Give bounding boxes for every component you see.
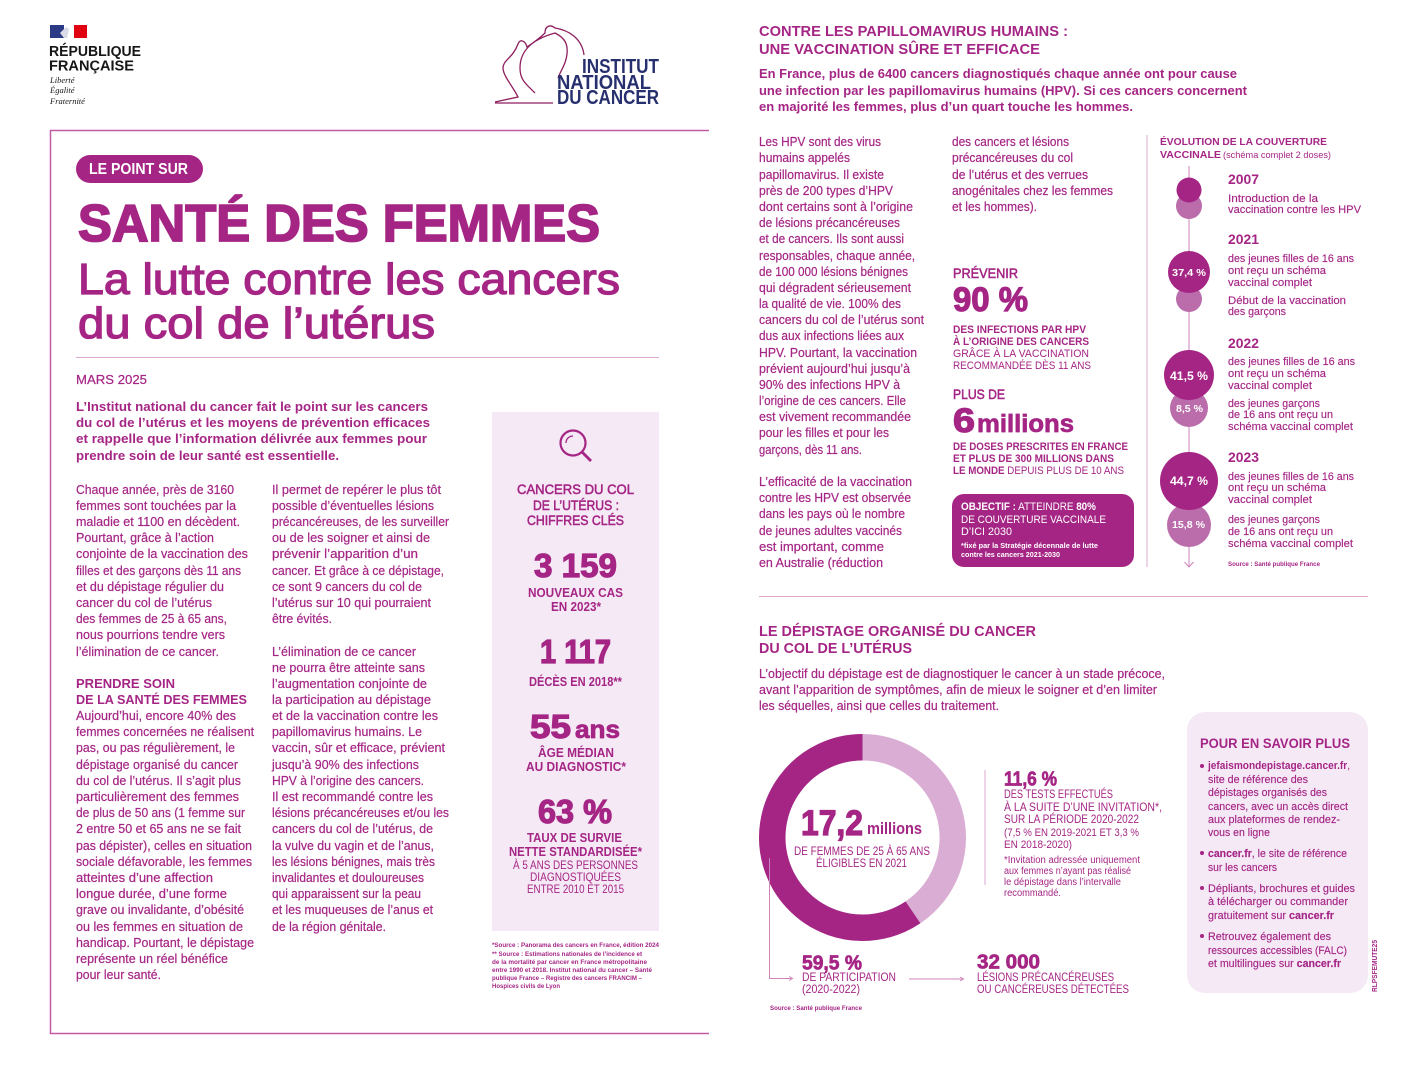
year 2022: de 16 ans ont reçu un (1228, 409, 1333, 421)
text column: HPV: garçons, dès 11 ans. (759, 443, 862, 457)
intro: dépistage (759, 667, 1165, 713)
text column 1: sociale défavorable, les femmes (76, 855, 252, 869)
stat: participation: (2020-2022) (802, 984, 860, 996)
stat: survie: ENTRE 2010 ET 2015 (527, 884, 624, 896)
donut centre label: ÉLIGIBLES EN 2021 (816, 857, 907, 870)
item: ressources: ressources accessibles (FALC) (1208, 945, 1347, 957)
stat: tests après invitation: aux femmes n’ayant pas réalisé (1004, 866, 1131, 877)
text column 2: de la région génitale. (272, 920, 386, 934)
year 2021: Début de la vaccination (1228, 295, 1346, 307)
stat: âge médian (526, 708, 626, 774)
year 2007: 2007 (1228, 172, 1259, 187)
text column 2: Il est recommandé contre les (272, 790, 433, 804)
heading: vaccination (759, 23, 1068, 58)
text column 2 (271, 483, 449, 934)
stat: survie: NETTE STANDARDISÉE* (509, 844, 642, 859)
text column: HPV suite: des cancers et lésions (952, 135, 1069, 149)
stat: tests après invitation: DES TESTS EFFECTUÉS (1004, 788, 1113, 801)
text column 2: HPV à l’origine des cancers. (272, 774, 424, 788)
stat: nouveaux cas: 3 159 (534, 547, 617, 584)
heading: prendre soin (76, 676, 247, 707)
year 2023: 44,7 % (1170, 476, 1208, 488)
timeline heading (1160, 135, 1331, 161)
intro text: et rappelle que l’information délivrée aux femmes pour (76, 431, 427, 446)
footnotes: ** Source : Estimations nationales de l’incidence et (492, 951, 643, 958)
stat: survie (509, 793, 642, 896)
logo: République française: Égalité (49, 85, 76, 95)
year 2023: schéma vaccinal complet (1228, 538, 1354, 550)
tag: le point sur (76, 155, 203, 183)
year 2022: vaccinal complet (1228, 380, 1313, 392)
stat: nouveaux cas (528, 547, 623, 614)
text column 2: l’utérus sur 10 qui pourraient (272, 596, 431, 610)
left page frame (50, 130, 709, 1034)
stat: lésions détectées: OU CANCÉREUSES DÉTECTÉES (977, 983, 1129, 996)
stat: survie: 63 % (538, 793, 612, 830)
text column 1: longue durée, d’une forme (76, 887, 227, 901)
intro text: L’Institut national du cancer fait le point sur les cancers (76, 399, 428, 414)
heading: dépistage: LE DÉPISTAGE ORGANISÉ DU CANCER (759, 623, 1037, 640)
donut centre label: DE FEMMES DE 25 À 65 ANS (794, 845, 930, 858)
footnotes: *Source : Panorama des cancers en France, édition 2024 (492, 942, 659, 949)
intro: vaccination: en majorité les femmes, plus d’un quart touche les hommes. (759, 99, 1133, 114)
text column: HPV: en Australie (réduction (759, 556, 883, 570)
text column 2: les lésions bénignes, mais très (272, 855, 435, 869)
stat: 6 millions: LE MONDE DEPUIS PLUS DE 10 ANS (953, 465, 1124, 477)
year 2023: 15,8 % (1172, 519, 1206, 531)
document reference code: RLPSFEMUTE25 (1370, 940, 1379, 992)
heading: prendre soin: PRENDRE SOIN (76, 676, 175, 691)
text column 2: ne pourra être atteinte sans (272, 661, 425, 675)
text column 1: et du dépistage régulier du (76, 580, 224, 594)
source: dépistage: Source : Santé publique France (770, 1005, 862, 1012)
stat: participation: 59,5 % (802, 952, 862, 974)
text column: HPV: de 100 000 lésions bénignes (759, 265, 908, 279)
donut centre label: 17,2 (801, 804, 863, 843)
text column 2: lésions précancéreuses et/ou les (272, 806, 449, 820)
heading: chiffres clés (517, 481, 634, 528)
text column 2: vaccin, sûr et efficace, prévient (272, 741, 445, 755)
donut centre label: millions (867, 819, 922, 838)
logo: Institut national du cancer (495, 26, 659, 109)
item: cancer.fr: cancer.fr, le site de référence (1208, 848, 1347, 860)
stat: tests après invitation: (7,5 % EN 2019-2021 ET 3,3 % (1004, 827, 1139, 839)
logo: République française: Fraternité (49, 96, 86, 106)
item: jefaismondepistage: aux plateformes de rendez- (1208, 814, 1340, 826)
text column 2: jusqu’à 90% des infections (271, 758, 419, 772)
text column 1: cancer du col de l’utérus (76, 596, 212, 610)
text column 2: cancer. Et grâce à ce dépistage, (272, 564, 444, 578)
text column: HPV suite: précancéreuses du col (952, 151, 1073, 165)
text column: HPV suite: et les hommes). (952, 200, 1037, 214)
stat: prévenir 90%: GRÂCE À LA VACCINATION (953, 347, 1089, 360)
year 2023: de 16 ans ont reçu un (1228, 526, 1333, 538)
footnotes (492, 942, 659, 990)
logo: Institut national du cancer: DU CANCER (557, 87, 659, 109)
stat: prévenir 90%: RECOMMANDÉE DÈS 11 ANS (953, 359, 1091, 372)
stat: nouveaux cas: NOUVEAUX CAS (528, 586, 623, 600)
text column: HPV: 90% des infections HPV à (759, 378, 900, 392)
text column 2: ce sont 9 cancers du col de (272, 580, 422, 594)
heading: chiffres clés: DE L’UTÉRUS : (533, 497, 619, 513)
intro: dépistage: les séquelles, ainsi que celles du traitement. (759, 699, 999, 713)
text column 2: L’élimination de ce cancer (272, 645, 416, 659)
text column 2: cancers du col de l’utérus, de (272, 822, 433, 836)
text column 1: Aujourd’hui, encore 40% des (76, 709, 236, 723)
text column 2: Il permet de repérer le plus tôt (272, 483, 442, 497)
timeline axis (1184, 166, 1194, 567)
text column 1: conjointe de la vaccination des (76, 547, 248, 561)
text column 2: ou de les soigner et ainsi de (272, 531, 430, 545)
stat: 6 millions: millions (977, 410, 1074, 438)
timeline source: Source : Santé publique France (1228, 561, 1320, 568)
item: dépliants (1200, 883, 1355, 922)
stat: 6 millions: DE DOSES PRESCRITES EN FRANCE (953, 441, 1128, 453)
year 2023: 2023 (1228, 450, 1259, 465)
text column 2: papillomavirus humains. Le (272, 725, 422, 739)
text column 2: qui apparaissent sur la peau (272, 887, 421, 901)
intro text: prendre soin de leur santé est essentielle. (76, 448, 339, 463)
stat: participation (802, 952, 896, 996)
text column 1: Chaque année, près de 3160 (76, 483, 234, 497)
text column: HPV: Les HPV sont des virus (759, 135, 881, 149)
heading: chiffres clés: CANCERS DU COL (517, 481, 634, 497)
year 2021 (1168, 232, 1354, 318)
tag: le point sur: LE POINT SUR (89, 161, 188, 178)
text column: HPV: et de cancers. Ils sont aussi (759, 232, 904, 246)
text column: HPV: prévient aujourd’hui jusqu’à (759, 362, 910, 376)
text column: HPV: est vivement recommandée (759, 410, 911, 424)
logo: République française (49, 25, 141, 106)
text column 2: possible d’éventuelles lésions (272, 499, 434, 513)
donut centre label (794, 804, 930, 870)
heading: dépistage: DU COL DE L’UTÉRUS (759, 640, 912, 657)
year 2023: ont reçu un schéma (1228, 482, 1327, 494)
heading: dépistage (759, 623, 1037, 657)
callout: objectif 80%: DE COUVERTURE VACCINALE (961, 514, 1106, 526)
text column 1: pas dépister), celles en situation (76, 839, 252, 853)
arrow: donut to participation (770, 858, 792, 980)
year 2022: ont reçu un schéma (1228, 368, 1327, 380)
title: SANTÉ DES FEMMES (78, 195, 600, 253)
text column 1: représente un réel bénéfice (76, 952, 228, 966)
text column 1: de plus de 50 ans (1 femme sur (76, 806, 245, 820)
stat: âge médian: 55 (530, 708, 571, 745)
item: cancer.fr: sur les cancers (1208, 862, 1277, 874)
item: jefaismondepistage: jefaismondepistage.cancer.fr, (1207, 760, 1350, 772)
year 2007 (1176, 172, 1361, 219)
year 2022 (1164, 336, 1355, 433)
text column 1: des femmes de 25 à 65 ans, (76, 612, 227, 626)
intro: dépistage: L’objectif du dépistage est de diagnostiquer le cancer à un stade précoce, (759, 667, 1165, 681)
text column: HPV suite: de l’utérus et des verrues (952, 168, 1088, 182)
year 2021: 2021 (1228, 232, 1259, 247)
text column 1: ou les femmes en situation de (76, 920, 243, 934)
text column: HPV: de lésions précancéreuses (759, 216, 900, 230)
year 2007: Introduction de la (1228, 193, 1319, 205)
stat: tests après invitation: 11,6 % (1004, 768, 1057, 790)
stat: tests après invitation: le dépistage dans l’intervalle (1004, 877, 1122, 888)
year 2021: 37,4 % (1172, 267, 1207, 279)
stat: tests après invitation: À LA SUITE D’UNE INVITATION*, (1004, 801, 1162, 814)
item: ressources (1200, 931, 1347, 970)
item: dépliants: gratuitement sur cancer.fr (1208, 910, 1335, 922)
text column: HPV suite (952, 135, 1113, 214)
item: ressources: Retrouvez également des (1208, 931, 1331, 943)
timeline heading: VACCINALE (1160, 149, 1221, 161)
item: cancer.fr (1200, 848, 1347, 874)
year 2022: des jeunes filles de 16 ans (1228, 356, 1355, 368)
text column 2: invalidantes et douloureuses (272, 871, 424, 885)
text column: HPV: qui dégradent sérieusement (759, 281, 911, 295)
stat: survie: DIAGNOSTIQUÉES (530, 871, 621, 884)
subtitle: du col de l’utérus (78, 300, 435, 348)
text column: HPV: pour les filles et pour les (759, 426, 889, 440)
text column 1: du col de l’utérus. Il s’agit plus (76, 774, 241, 788)
stat: tests après invitation (1004, 768, 1162, 899)
stat: prévenir 90% (953, 265, 1091, 372)
subtitle: La lutte contre les cancers (78, 256, 620, 304)
item: jefaismondepistage: vous en ligne (1208, 827, 1270, 839)
stat: 6 millions: 6 (953, 402, 975, 440)
stat: 6 millions: ET PLUS DE 300 MILLIONS DANS (953, 453, 1114, 465)
heading: chiffres clés: CHIFFRES CLÉS (527, 512, 624, 528)
year 2022: schéma vaccinal complet (1228, 421, 1354, 433)
intro: vaccination: une infection par les papillomavirus humains (HPV). Si ces cancers concernent (759, 83, 1248, 98)
stat: nouveaux cas: EN 2023* (551, 600, 601, 614)
item: jefaismondepistage: dépistages organisés des (1208, 787, 1327, 799)
text column 1: grave ou invalidante, d’obésité (76, 903, 244, 917)
footnotes: Hospices civils de Lyon (492, 983, 560, 990)
text column 1: femmes sont touchées par la (76, 499, 236, 513)
stat: prévenir 90%: PRÉVENIR (953, 265, 1018, 281)
year 2022: 8,5 % (1176, 403, 1204, 415)
stat: lésions détectées: 32 000 (977, 952, 1040, 974)
logo: Institut national du cancer: INSTITUT (582, 56, 659, 78)
year 2021: des jeunes filles de 16 ans (1228, 253, 1354, 265)
text column 1 (76, 483, 254, 982)
callout: objectif 80%: *fixé par la Stratégie décennale de lutte (961, 543, 1098, 550)
year 2023: des jeunes filles de 16 ans (1228, 471, 1354, 483)
stat: prévenir 90%: DES INFECTIONS PAR HPV (953, 324, 1087, 336)
stat: décès: DÉCÈS EN 2018** (529, 674, 622, 689)
heading: vaccination: UNE VACCINATION SÛRE ET EFFICACE (759, 40, 1040, 58)
timeline: couverture vaccinale (1160, 135, 1361, 568)
donut chart: participation (772, 747, 953, 928)
logo: République française: FRANÇAISE (49, 58, 134, 74)
text column: HPV: dont certains sont à l’origine (759, 200, 913, 214)
footnotes: de la mortalité par cancer en France métropolitaine (492, 959, 647, 966)
stat: âge médian: ÂGE MÉDIAN (538, 745, 614, 760)
text column: HPV (759, 135, 924, 570)
text column 1: nous pourrions tendre vers (76, 628, 225, 642)
timeline heading: ÉVOLUTION DE LA COUVERTURE (1160, 135, 1327, 148)
item: ressources: et multilingues sur cancer.fr (1208, 958, 1342, 970)
logo: République française: Liberté (49, 75, 76, 85)
intro text: du col de l’utérus et les moyens de prévention efficaces (76, 415, 430, 430)
intro: vaccination: En France, plus de 6400 cancers diagnostiqués chaque année ont pour cause (759, 66, 1237, 81)
text column 2: et les muqueuses de l’anus et (272, 903, 433, 917)
stat: âge médian: ans (575, 716, 620, 744)
callout: objectif 80%: D’ICI 2030 (961, 526, 1012, 538)
year 2023: vaccinal complet (1228, 494, 1313, 506)
icon: magnifier (560, 430, 591, 461)
text column: HPV: est important, comme (759, 540, 884, 554)
text column: HPV: responsables, chaque année, (759, 249, 915, 263)
text column 2: et de la vaccination contre les (272, 709, 438, 723)
text column: HPV: cancers du col de l’utérus sont (759, 313, 924, 327)
year 2022: des jeunes garçons (1228, 398, 1320, 410)
logo: Institut national du cancer: NATIONAL (557, 72, 651, 94)
intro: vaccination (759, 66, 1248, 114)
item: jefaismondepistage: cancers, avec un accès direct (1208, 801, 1349, 813)
stat: décès (529, 633, 622, 689)
text column 1: pas, ou pas régulièrement, le (76, 741, 235, 755)
text column 1: Pourtant, grâce à l’action (76, 531, 214, 545)
text column: HPV: HPV. Pourtant, la vaccination (759, 346, 917, 360)
stat: tests après invitation: EN 2018-2020) (1004, 839, 1072, 851)
stat: lésions détectées (977, 952, 1129, 996)
stat: tests après invitation: recommandé. (1004, 888, 1061, 899)
text column 1: maladie et 1100 en décèdent. (76, 515, 240, 529)
text column 1: dépistage organisé du cancer (76, 758, 238, 772)
text column 1: atteintes d’une affection (76, 871, 213, 885)
text column: HPV: papillomavirus. Il existe (759, 168, 884, 182)
text column 1: handicap. Pourtant, le dépistage (76, 936, 254, 950)
text column 2: l’augmentation conjointe de (272, 677, 427, 691)
text column: HPV: la qualité de vie. 100% des (759, 297, 901, 311)
year 2023 (1160, 450, 1354, 550)
year 2023: des jeunes garçons (1228, 514, 1320, 526)
panel: pour en savoir plus (1187, 712, 1368, 993)
text column 2: prévenir l’apparition d’un (272, 547, 418, 561)
text column 2: la vulve du vagin et de l’anus, (272, 839, 434, 853)
year 2021: ont reçu un schéma (1228, 265, 1327, 277)
text column: HPV: dans les pays où le nombre (759, 507, 905, 521)
text column 1: femmes concernées ne réalisent (76, 725, 254, 739)
stat: âge médian: AU DIAGNOSTIC* (526, 760, 626, 774)
panel: chiffres clés (492, 412, 659, 931)
footnotes: entre 1990 et 2018. Institut national du cancer – Santé (492, 967, 652, 974)
date: MARS 2025 (76, 373, 147, 387)
arrow: participation to lésions (909, 977, 964, 981)
subtitle (78, 256, 620, 348)
text column 2: la participation au dépistage (272, 693, 431, 707)
text column: HPV: de jeunes adultes vaccinés (759, 524, 902, 538)
text column: HPV: près de 200 types d’HPV (759, 184, 894, 198)
intro text (76, 399, 430, 463)
year 2021: vaccinal complet (1228, 277, 1313, 289)
heading: vaccination: CONTRE LES PAPILLOMAVIRUS HUMAINS : (759, 23, 1068, 40)
logo: République française: RÉPUBLIQUE (49, 43, 141, 60)
year 2022: 41,5 % (1170, 371, 1208, 383)
text column 1: particulièrement des femmes (76, 790, 239, 804)
item: jefaismondepistage (1200, 760, 1350, 839)
stat: prévenir 90%: À L’ORIGINE DES CANCERS (953, 335, 1089, 348)
text column 1: 2 entre 50 et 65 ans ne se fait (76, 822, 241, 836)
timeline heading: (schéma complet 2 doses) (1223, 150, 1331, 161)
callout: objectif 80%: contre les cancers 2021-2030 (961, 552, 1060, 559)
text column: HPV suite: anogénitales chez les femmes (952, 184, 1113, 198)
stat: 6 millions: PLUS DE (953, 386, 1005, 402)
text column 1: filles et des garçons dès 11 ans (76, 564, 241, 578)
stat: survie: TAUX DE SURVIE (527, 831, 622, 845)
text column: HPV: dus aux infections liées aux (759, 329, 905, 343)
text column 2: être évités. (272, 612, 332, 626)
stat: participation: DE PARTICIPATION (802, 972, 896, 984)
stat: tests après invitation: *Invitation adressée uniquement (1004, 855, 1140, 866)
footnotes: publique France – Registre des cancers FRANCIM – (492, 975, 642, 982)
year 2021: des garçons (1228, 306, 1286, 318)
item: jefaismondepistage: site de référence des (1208, 774, 1308, 786)
year 2007: vaccination contre les HPV (1228, 204, 1361, 216)
stat: décès: 1 117 (540, 633, 611, 670)
stat: prévenir 90%: 90 % (953, 281, 1028, 319)
panel heading: POUR EN SAVOIR PLUS (1200, 736, 1350, 751)
intro: dépistage: avant l’apparition de symptômes, afin de mieux le soigner et d’en limiter (759, 683, 1157, 697)
text column: HPV: contre les HPV est observée (759, 491, 911, 505)
text column 1: pour leur santé. (76, 968, 161, 982)
text column: HPV: l’origine de ces cancers. Elle (759, 394, 906, 408)
stat: survie: À 5 ANS DES PERSONNES (513, 859, 638, 872)
item: dépliants: Dépliants, brochures et guides (1208, 883, 1355, 895)
item: dépliants: à télécharger ou commander (1208, 896, 1348, 908)
stat: 6 millions (953, 386, 1128, 477)
heading: prendre soin: DE LA SANTÉ DES FEMMES (76, 692, 247, 707)
year 2022: 2022 (1228, 336, 1259, 351)
text column 1: l’élimination de ce cancer. (76, 645, 219, 659)
stat: tests après invitation: SUR LA PÉRIODE 2020-2022 (1004, 813, 1139, 826)
stat: lésions détectées: LÉSIONS PRÉCANCÉREUSES (977, 971, 1114, 984)
text column: HPV: L’efficacité de la vaccination (759, 475, 912, 489)
callout: objectif 80%: OBJECTIF : ATTEINDRE 80% (961, 501, 1096, 513)
text column 2: précancéreuses, de les surveiller (272, 515, 449, 529)
callout: objectif 80% (952, 494, 1134, 567)
text column: HPV: humains appelés (759, 151, 850, 165)
